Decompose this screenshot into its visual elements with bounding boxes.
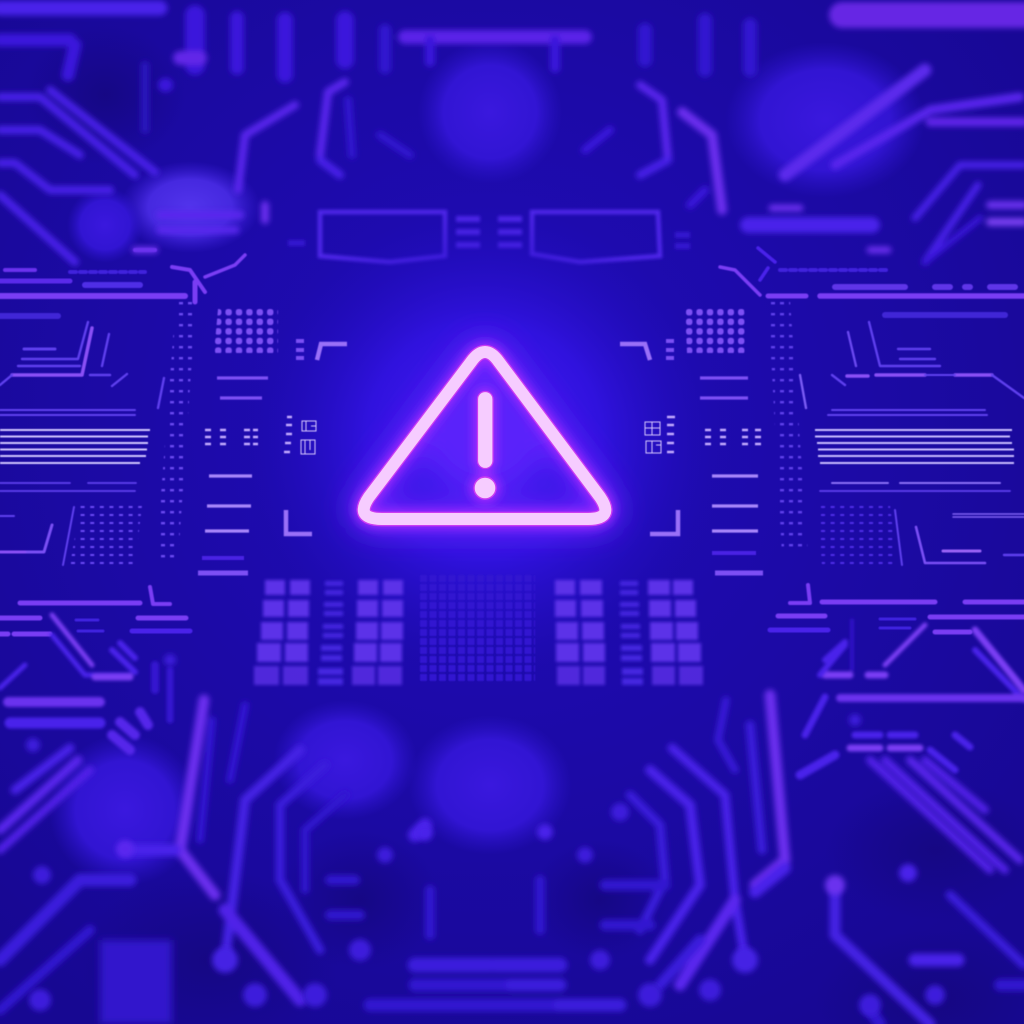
exclamation glow <box>470 388 500 503</box>
right bright stripes <box>815 430 1014 463</box>
blurred traces: top <box>0 8 1024 262</box>
blurred traces: bottom <box>0 695 1024 1024</box>
dim board block, bottom left <box>100 940 172 1024</box>
left side panel traces <box>0 316 164 565</box>
center fine grid <box>420 575 535 683</box>
via pads <box>26 654 945 1016</box>
blurred frames above chip <box>288 212 690 262</box>
tiny chip glyphs <box>301 421 661 454</box>
triangle outline <box>364 352 605 519</box>
left bright stripes <box>0 430 150 463</box>
icon: warning triangle <box>364 352 605 519</box>
lower side traces, soft <box>0 615 1024 775</box>
dotted columns and dot fields <box>70 300 897 566</box>
chip dot matrices <box>214 309 748 353</box>
triangle outline rim <box>364 352 605 519</box>
triangle outline glow <box>364 352 605 519</box>
chip upper traces <box>0 248 1024 302</box>
pad grids <box>254 580 703 685</box>
right side panel traces <box>800 315 1024 565</box>
center glow <box>249 205 719 675</box>
lower side traces <box>0 585 1024 634</box>
warning halo <box>364 352 605 519</box>
chip small marks <box>198 341 763 573</box>
exclamation bar <box>478 392 493 468</box>
soft blurred blobs <box>49 40 925 886</box>
exclamation dot <box>474 477 496 499</box>
corner brackets <box>286 344 678 534</box>
